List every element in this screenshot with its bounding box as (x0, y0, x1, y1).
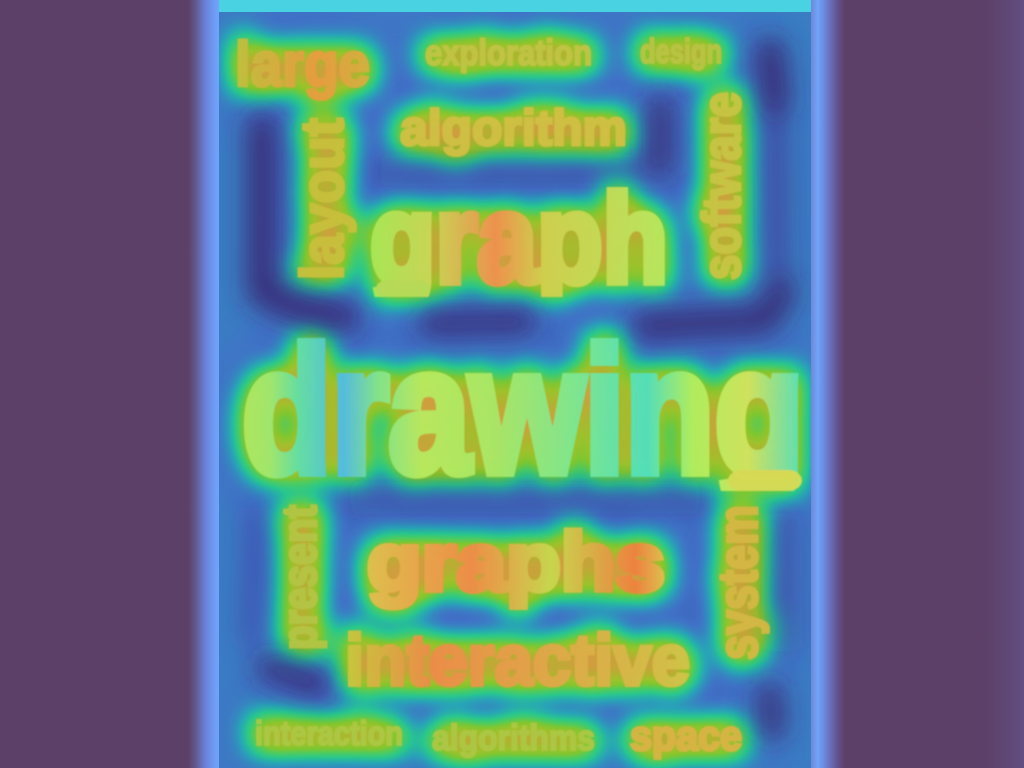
heat layer: blurred word density: drawing (242, 311, 804, 510)
word: algorithms: algorithms (432, 717, 595, 758)
heat layer: blurred word density: design (640, 33, 722, 71)
word: large: large (235, 30, 370, 100)
heat layer: blurred word density: exploration (425, 32, 592, 73)
word: space: space (630, 712, 742, 759)
heat layer: blurred word density: system (706, 505, 769, 660)
heat layer: blurred word density: interaction (255, 715, 403, 753)
background: right edge tint (985, 0, 1024, 768)
heat layer: blurred word density: algorithms (432, 717, 595, 758)
drawing g tail (728, 470, 802, 491)
word: graphs: graphs (367, 517, 665, 608)
words: crisp word cloud (235, 30, 804, 759)
word: drawing: drawing (242, 311, 804, 510)
heat layer: blurred word density: interactive (345, 621, 690, 701)
word: exploration: exploration (425, 32, 592, 73)
word: software: software (692, 92, 752, 280)
panel: cyan top strip (219, 0, 811, 12)
cold bands: dark navy rings (250, 52, 782, 728)
heat layer: blurred word density: present (274, 505, 327, 650)
heat layer: blurred word density: large (235, 30, 370, 100)
heat layer: blurred word density: graph (370, 170, 668, 309)
panel edge glow: right (811, 0, 845, 768)
panel edge glow: left (188, 0, 219, 768)
word: layout: layout (289, 118, 356, 280)
heat layer: blurred word density: software (692, 92, 752, 280)
word: system: system (706, 505, 769, 660)
heat layer: blurred word density: layout (289, 118, 356, 280)
graph g tail (376, 280, 430, 297)
heat layer: blurred word density: space (630, 712, 742, 759)
word: algorithm: algorithm (400, 100, 627, 156)
word: interactive: interactive (345, 621, 690, 701)
word: graph: graph (370, 170, 668, 309)
word: design: design (640, 33, 722, 71)
word: present: present (274, 505, 327, 650)
heat layer: blurred word density: algorithm (400, 100, 627, 156)
word: interaction: interaction (255, 715, 403, 753)
panel: word cloud heatmap (235, 30, 804, 759)
heat layer: blurred word density (235, 30, 804, 759)
heat layer: blurred word density: graphs (367, 517, 665, 608)
